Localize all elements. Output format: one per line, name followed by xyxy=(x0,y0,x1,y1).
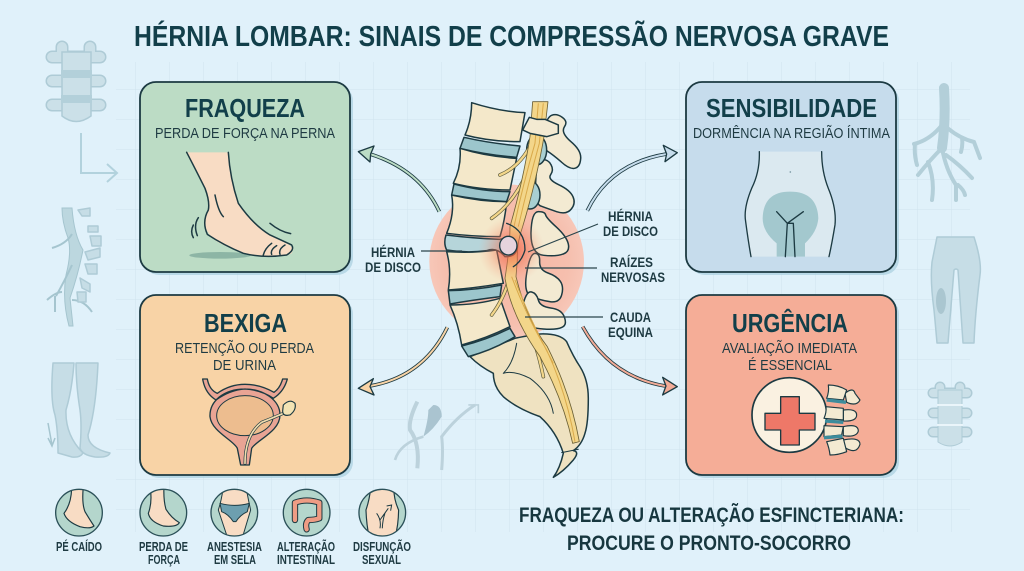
central spine illustration xyxy=(429,102,588,477)
panel: fraqueza xyxy=(140,82,353,275)
bottom warning text: FRAQUEZA OU ALTERAÇÃO ESFINCTERIANA: xyxy=(519,504,904,527)
icon: pé caído xyxy=(56,487,102,536)
subtitle: bexiga: DE URINA xyxy=(213,357,276,374)
subtitle: urgência: AVALIAÇÃO IMEDIATA xyxy=(722,340,857,357)
label: disfunção sexual: SEXUAL xyxy=(362,553,401,567)
top collar xyxy=(523,117,558,137)
decorative ghost nerve icon xyxy=(395,402,478,470)
icon: bladder xyxy=(203,379,295,465)
label: pé caído: PÉ CAÍDO xyxy=(56,539,102,554)
ghost arrow left xyxy=(81,133,117,182)
subtitle: urgência: É ESSENCIAL xyxy=(748,357,832,374)
ghost vertebrae top left xyxy=(52,47,100,122)
panel: bexiga xyxy=(140,295,353,478)
sacrum xyxy=(470,334,588,477)
subtitle: bexiga: RETENÇÃO OU PERDA xyxy=(175,340,314,357)
leader lines xyxy=(421,224,603,317)
label: hérnia de disco right: HÉRNIA xyxy=(608,209,653,224)
vertebrae xyxy=(447,103,525,345)
heading: urgência: URGÊNCIA xyxy=(732,308,848,338)
icon: foot xyxy=(187,152,293,259)
ghost nerve tree right xyxy=(914,88,980,200)
label: hérnia de disco left: DE DISCO xyxy=(365,260,421,275)
spinous processes xyxy=(522,115,581,329)
label: anestesia em sela: EM SELA xyxy=(214,553,256,567)
icon: pelvic region xyxy=(745,152,835,257)
ghost nerve and vertebrae left xyxy=(47,208,101,326)
label: hérnia de disco right: DE DISCO xyxy=(603,224,658,239)
label: alteração intestinal: ALTERAÇÃO xyxy=(277,539,335,554)
subtitle: fraqueza: PERDA DE FORÇA NA PERNA xyxy=(155,125,335,142)
label: hérnia de disco left: HÉRNIA xyxy=(371,245,415,260)
icon: disfunção sexual xyxy=(359,487,406,537)
arrow: to fraqueza xyxy=(358,146,439,212)
label: raízes nervosas: NERVOSAS xyxy=(601,270,665,285)
label: raízes nervosas: RAÍZES xyxy=(610,255,653,270)
small discs xyxy=(527,135,547,165)
callout labels xyxy=(365,209,665,340)
panel: urgência xyxy=(686,295,899,478)
left decorative anatomy icons xyxy=(47,47,117,457)
right decorative anatomy icons xyxy=(914,88,980,446)
label: cauda equina: EQUINA xyxy=(608,325,653,340)
heading: fraqueza: FRAQUEZA xyxy=(185,93,305,123)
ghost legs left xyxy=(48,363,110,457)
ghost legs right xyxy=(931,237,980,343)
cauda equina and nerve roots xyxy=(492,102,579,443)
heading: sensibilidade: SENSIBILIDADE xyxy=(706,93,877,123)
icon: alteração intestinal xyxy=(283,489,330,536)
arrow: to sensibilidade xyxy=(587,145,677,211)
icon: medical cross with spine xyxy=(752,378,860,455)
subtitle: sensibilidade: DORMÊNCIA NA REGIÃO ÍNTIMA xyxy=(693,125,890,142)
bottom warning text: PROCURE O PRONTO-SOCORRO xyxy=(567,532,851,555)
arrow: to urgência xyxy=(583,327,677,395)
label: disfunção sexual: DISFUNÇÃO xyxy=(353,539,411,554)
label: perda de força: PERDA DE xyxy=(139,540,188,554)
arrow: to bexiga xyxy=(358,327,447,395)
panel: sensibilidade xyxy=(686,82,899,275)
title: HÉRNIA LOMBAR: SINAIS DE COMPRESSÃO NERVOSA GRAVE xyxy=(134,19,889,53)
pink inflammation zone xyxy=(429,184,584,339)
ghost vertebrae right xyxy=(933,387,967,446)
label: anestesia em sela: ANESTESIA xyxy=(207,540,262,554)
label: perda de força: FORÇA xyxy=(148,553,180,567)
icon: anestesia em sela xyxy=(211,487,258,540)
intervertebral discs xyxy=(448,137,520,357)
label: alteração intestinal: INTESTINAL xyxy=(277,553,335,567)
herniated disc xyxy=(445,217,545,283)
icon row: associated symptoms xyxy=(56,487,411,567)
heading: bexiga: BEXIGA xyxy=(204,308,287,338)
label: cauda equina: CAUDA xyxy=(610,310,651,325)
icon: perda de força xyxy=(140,487,187,536)
